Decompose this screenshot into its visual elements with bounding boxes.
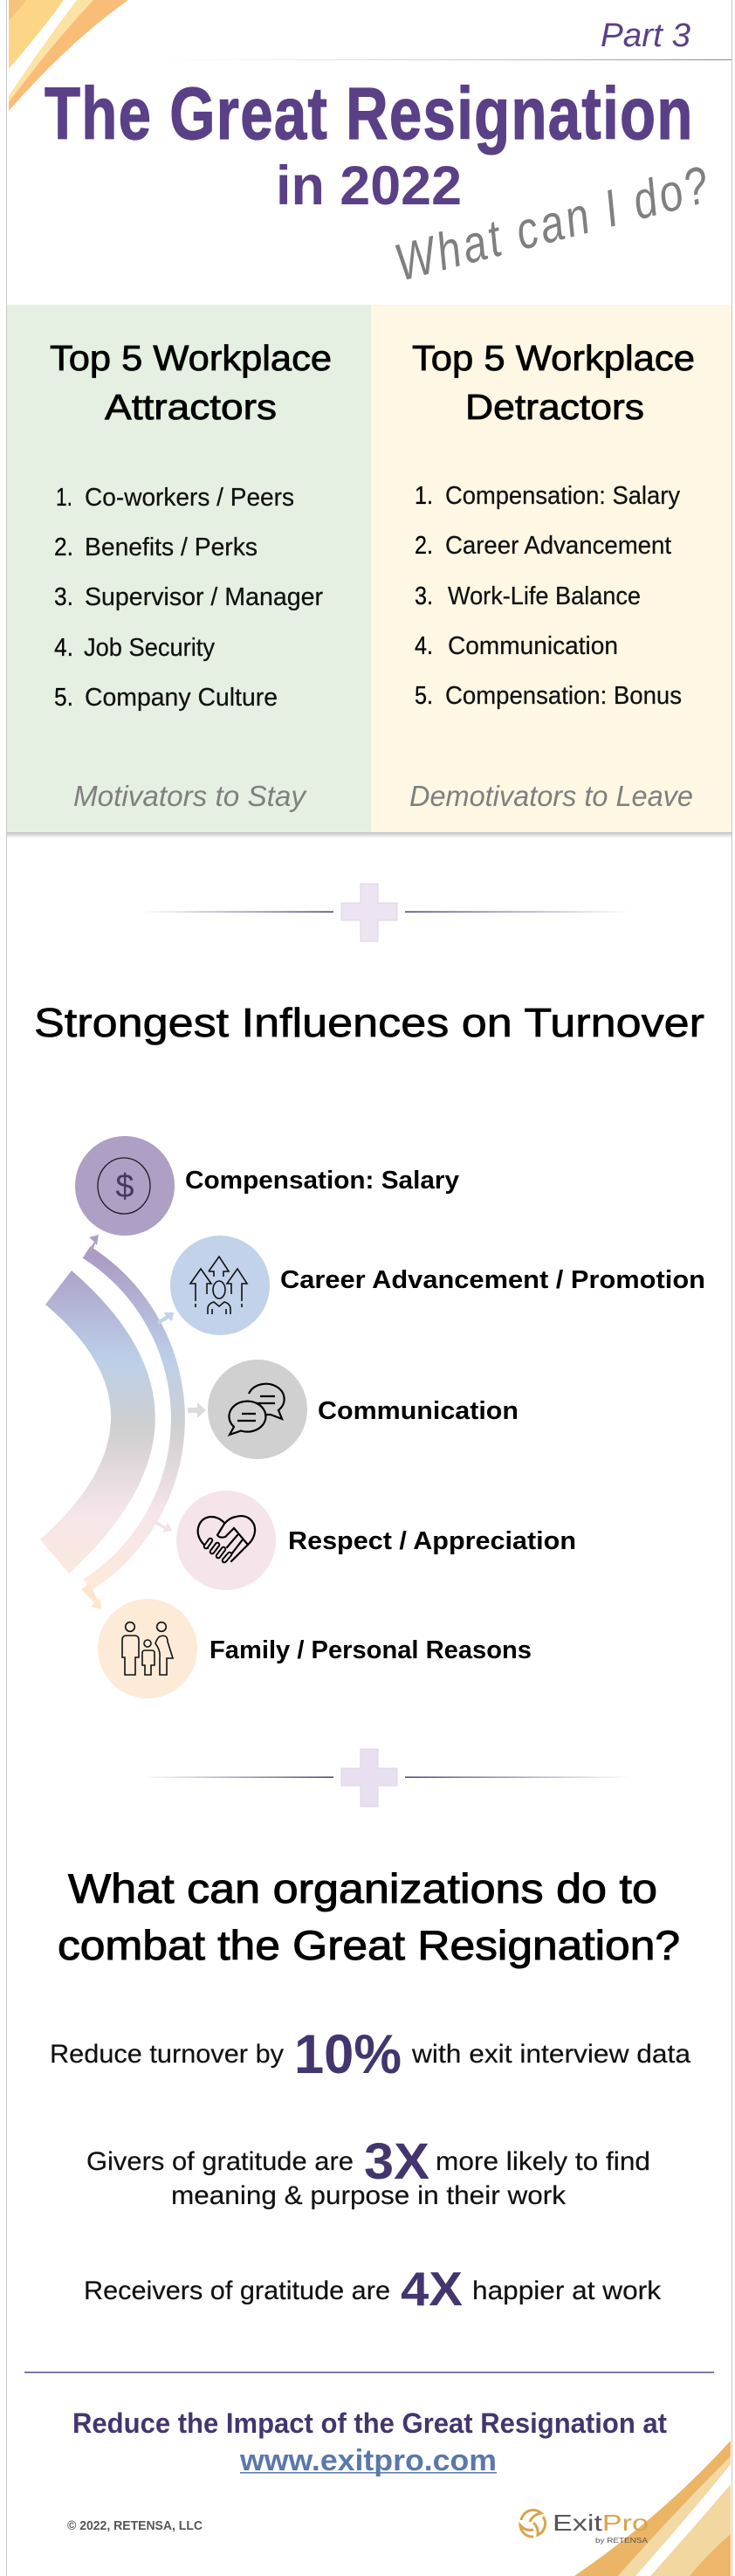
stat: reduce turnover 10%: Reduce turnover by [50, 2040, 284, 2069]
icon: logo swirl [520, 2511, 546, 2537]
item: career advancement [170, 1236, 705, 1335]
icon: arrows and person [190, 1257, 247, 1314]
stat: receivers of gratitude 4X: Receivers of gratitude are [84, 2276, 390, 2305]
panel: detractors: 4. [415, 632, 433, 660]
big arc [40, 1271, 155, 1574]
item: compensation salary [75, 1136, 459, 1236]
panel: attractors: Supervisor / Manager [85, 583, 323, 611]
panel: attractors: Co-workers / Peers [85, 484, 294, 512]
stat: reduce turnover 10% [50, 2024, 690, 2085]
chart: curved influences arc [40, 1235, 206, 1609]
panel: detractors: Top 5 Workplace [412, 338, 695, 378]
heading: strongest influences: Strongest Influences on Turnover [34, 1000, 704, 1045]
stat: givers of gratitude 3X: meaning & purpose in their work [171, 2181, 567, 2210]
logo: ExitPro: by RETENSA [595, 2536, 648, 2545]
logo: ExitPro [520, 2510, 649, 2545]
arrow to salary [88, 1235, 99, 1253]
title: in 2022 [276, 155, 462, 217]
panel: detractors: Detractors [465, 387, 644, 427]
panel: attractors: Motivators to Stay [73, 780, 308, 812]
panel: detractors: Career Advancement [445, 532, 671, 560]
panel: attractors: Benefits / Perks [85, 534, 258, 561]
call to action: Reduce the Impact of the Great Resignation at [72, 2407, 667, 2439]
thin arc [86, 1252, 178, 1585]
stat: receivers of gratitude 4X: happier at work [472, 2276, 662, 2305]
item: communication: Communication [318, 1397, 519, 1425]
panel: attractors: 1. [56, 484, 72, 512]
part label: Part 3 [601, 17, 690, 54]
logo: ExitPro: Exit Pro [553, 2510, 649, 2536]
stat: receivers of gratitude 4X [84, 2262, 662, 2316]
panel: attractors and detractors [7, 305, 732, 838]
panel: detractors: Work-Life Balance [448, 582, 641, 610]
item: family personal reasons [98, 1599, 532, 1698]
call to action: www.exitpro.com [239, 2444, 497, 2477]
stat: givers of gratitude 3X: 3X [364, 2133, 429, 2190]
panel: attractors: 3. [54, 583, 73, 611]
panel: attractors: Top 5 Workplace [50, 338, 332, 378]
title [45, 73, 692, 217]
panel: attractors [7, 305, 371, 832]
panel: detractors: Compensation: Bonus [445, 682, 682, 710]
stat: reduce turnover 10%: 10% [294, 2024, 402, 2085]
divider with plus [141, 884, 631, 941]
subtitle: what can I do: What can I do? [388, 155, 715, 293]
panel: attractors: 2. [54, 534, 73, 561]
panel: detractors: Communication [448, 632, 618, 660]
call to action [72, 2407, 667, 2477]
title: The Great Resignation [45, 73, 692, 155]
arrow to career [157, 1312, 174, 1325]
panel: attractors: Attractors [105, 387, 277, 427]
item: communication [208, 1360, 519, 1459]
icon: speech bubbles [229, 1384, 285, 1435]
divider with plus [141, 1749, 631, 1807]
item: respect appreciation [176, 1491, 576, 1590]
stat: receivers of gratitude 4X: 4X [401, 2262, 463, 2316]
panel: detractors: Compensation: Salary [445, 482, 680, 510]
icon: family [122, 1622, 173, 1675]
arrow to family [81, 1583, 101, 1609]
panel: detractors: 3. [415, 582, 433, 610]
arrow to respect [155, 1520, 172, 1533]
panel: detractors: 1. [415, 482, 433, 510]
heading: what can organizations do: What can organizations do to [68, 1865, 657, 1911]
heading: what can organizations do: combat the Great Resignation? [58, 1922, 680, 1968]
item: compensation salary: Compensation: Salary [185, 1167, 459, 1195]
panel: attractors: 4. [54, 634, 73, 662]
icon: dollar coin: $ [115, 1168, 134, 1205]
stat: givers of gratitude 3X: more likely to find [436, 2147, 650, 2176]
item: career advancement: Career Advancement / Promotion [280, 1266, 705, 1294]
panel: attractors: 5. [54, 684, 73, 712]
copyright: © 2022, RETENSA, LLC [67, 2519, 203, 2533]
stat: givers of gratitude 3X [86, 2133, 650, 2210]
stat: reduce turnover 10%: with exit interview data [411, 2040, 690, 2069]
decoration: top-left swoosh [9, 0, 128, 111]
decoration: bottom-right swoosh [574, 2441, 731, 2576]
item: respect appreciation: Respect / Appreciation [288, 1527, 576, 1555]
panel: detractors: 5. [415, 682, 433, 710]
panel: attractors: Company Culture [85, 684, 278, 712]
item: family personal reasons: Family / Personal Reasons [210, 1636, 532, 1664]
panel: detractors: Demotivators to Leave [409, 780, 693, 812]
icon: heart handshake [198, 1516, 255, 1561]
panel: detractors [371, 305, 732, 832]
icon: dollar coin [98, 1158, 150, 1214]
stat: givers of gratitude 3X: Givers of gratitude are [86, 2147, 354, 2176]
arrow to communication [188, 1402, 206, 1418]
panel: attractors: Job Security [84, 634, 215, 662]
panel: detractors: 2. [415, 532, 433, 560]
heading: what can organizations do [58, 1865, 680, 1968]
